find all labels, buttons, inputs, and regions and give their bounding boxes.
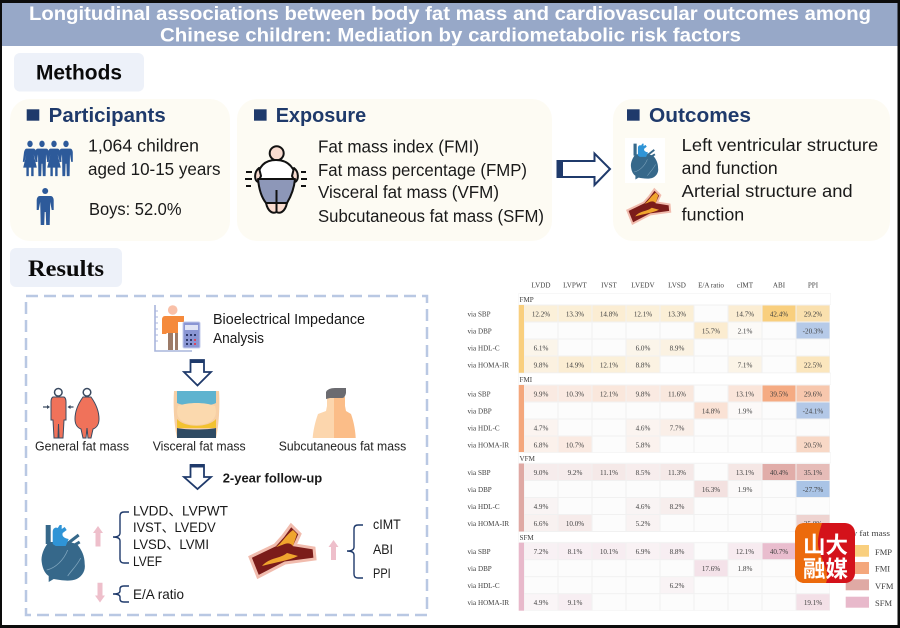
table group: FMP: 13.3% <box>668 310 686 318</box>
table group: FMP: 9.8% <box>534 362 548 370</box>
table group: FMP <box>468 294 831 373</box>
column headers: LVPWT <box>563 282 588 290</box>
table group: SFM: via HDL-C <box>468 582 500 590</box>
table group: FMP: 13.3% <box>566 310 584 318</box>
table group: FMI: via HDL-C <box>468 424 500 432</box>
icon: heart small <box>625 138 665 183</box>
table group: FMP: via HOMA-IR <box>468 362 509 370</box>
heatmap table <box>468 282 894 611</box>
table group: VFM: via HDL-C <box>468 503 500 511</box>
column headers: LVEDV <box>631 282 656 290</box>
icon: obese child with waist measure <box>245 146 307 213</box>
title banner <box>2 3 898 46</box>
watermark logo <box>795 523 855 583</box>
arrow: increase in arterial measures <box>328 540 338 560</box>
table group: SFM: via DBP <box>468 565 492 573</box>
table group: FMI: 4.6% <box>636 424 650 432</box>
text: 2-year follow-up: 2-year follow-up <box>223 471 322 486</box>
icon: boy <box>37 188 54 225</box>
table group: FMI: 29.6% <box>804 390 822 398</box>
table group: VFM: via HOMA-IR <box>468 520 509 528</box>
table group: VFM: 9.0% <box>534 469 548 477</box>
icon: heart <box>42 525 85 582</box>
heading: Methods: Methods <box>36 62 122 84</box>
table group: VFM: 16.3% <box>702 486 720 494</box>
table group: SFM: 9.1% <box>568 599 582 607</box>
text: participant count <box>88 136 221 179</box>
table group: FMI: 9.9% <box>534 390 548 398</box>
panel: exposure <box>237 99 552 241</box>
panel: participants <box>10 99 230 241</box>
table group: FMP: 15.7% <box>702 328 720 336</box>
table group: FMP: 8.8% <box>636 362 650 370</box>
table group: FMI: 1.9% <box>738 408 752 416</box>
table group: FMI: 10.7% <box>566 442 584 450</box>
text: LV measures: LVEF <box>133 553 162 569</box>
table group: VFM: 10.0% <box>566 520 584 528</box>
text: arterial measures: PPI <box>373 565 391 581</box>
text: general fat mass: General fat mass <box>35 439 129 454</box>
table group: VFM: 8.5% <box>636 469 650 477</box>
text: LV measures: LVDD、LVPWT <box>133 503 228 519</box>
table group: VFM: 5.2% <box>636 520 650 528</box>
table group: FMI: 6.8% <box>534 442 548 450</box>
column headers: ABI <box>773 282 786 290</box>
title banner: Chinese children: Mediation by cardiometabolic risk factors <box>160 26 741 46</box>
table group: SFM: 8.1% <box>568 548 582 556</box>
text: outcomes list: and function <box>682 158 778 178</box>
table group: SFM: SFM <box>520 534 534 542</box>
legend: body fat mass: FMI <box>875 564 890 574</box>
icon: group of four children <box>23 141 73 176</box>
table group: FMI: 5.8% <box>636 442 650 450</box>
table group: VFM: 11.1% <box>600 469 618 477</box>
table group: VFM: 1.9% <box>738 486 752 494</box>
icon: subcutaneous fat mass <box>313 388 356 438</box>
table group: FMP: via DBP <box>468 328 492 336</box>
table group: FMP: 14.7% <box>736 310 754 318</box>
table group: VFM: 4.9% <box>534 503 548 511</box>
table group: FMI: 13.1% <box>736 390 754 398</box>
table group: FMI: via HOMA-IR <box>468 442 509 450</box>
icon: artery small <box>627 189 670 224</box>
table group: VFM: VFM <box>520 455 536 463</box>
table group: SFM: 19.1% <box>804 599 822 607</box>
table group: FMP: 29.2% <box>804 310 822 318</box>
table group: FMP: 22.5% <box>804 362 822 370</box>
heading: Results: Results <box>28 256 104 281</box>
table group: VFM: 4.6% <box>636 503 650 511</box>
table group: FMP: 14.9% <box>566 362 584 370</box>
table group: FMP: FMP <box>520 296 534 304</box>
text: bioelectrical impedance analysis: Analysis <box>213 331 264 347</box>
text: arterial measures <box>373 516 401 581</box>
table group: SFM: 4.9% <box>534 599 548 607</box>
arrow: 2-year follow-up <box>184 464 211 489</box>
text: outcomes list <box>682 135 878 225</box>
text: exposure measures <box>318 137 544 226</box>
table group: FMI: 9.8% <box>636 390 650 398</box>
arrow: exposure to outcomes <box>557 154 610 185</box>
table group: FMI: 4.7% <box>534 424 548 432</box>
text: subcutaneous fat mass: Subcutaneous fat mass <box>279 439 407 454</box>
text: bioelectrical impedance analysis <box>213 312 365 347</box>
text: participant count: aged 10-15 years <box>88 159 221 179</box>
legend: body fat mass <box>837 528 894 608</box>
table group: FMP: 12.1% <box>600 362 618 370</box>
column headers: LVDD <box>531 282 551 290</box>
table group: FMI <box>468 373 831 453</box>
icon: general fat mass <box>43 388 99 438</box>
table group: SFM <box>468 532 831 611</box>
table group: FMP: -20.3% <box>803 328 823 336</box>
table group: FMI: via DBP <box>468 408 492 416</box>
table group: FMP: 7.1% <box>738 362 752 370</box>
table group: SFM: 12.1% <box>736 548 754 556</box>
panel: results flow <box>26 296 427 615</box>
column headers: E/A ratio <box>698 282 724 290</box>
table group: FMI: 11.6% <box>668 390 686 398</box>
table group: SFM: via SBP <box>468 548 491 556</box>
heading: Results <box>10 248 122 287</box>
table group: VFM: 11.3% <box>668 469 686 477</box>
table group: FMP: 6.0% <box>636 344 650 352</box>
table group: FMI: FMI <box>520 376 533 384</box>
title banner: Longitudinal associations between body fat mass and cardiovascular outcomes among <box>29 4 871 25</box>
table group: VFM: 25.0% <box>804 520 822 528</box>
text: outcomes list: Left ventricular structure <box>682 135 878 155</box>
table group: FMP: 42.4% <box>770 310 788 318</box>
bracket: LV measures <box>113 512 129 563</box>
table group: FMI: 12.1% <box>600 390 618 398</box>
table group: FMI: 20.5% <box>804 442 822 450</box>
text: outcomes list: function <box>682 205 744 225</box>
watermark logo: 融媒 <box>803 557 849 582</box>
table group: SFM: 1.8% <box>738 565 752 573</box>
table group: FMP: 6.1% <box>534 344 548 352</box>
icon: visceral fat mass <box>174 391 219 438</box>
text: exposure measures: Fat mass percentage (FMP) <box>318 160 527 180</box>
table group: SFM: 10.1% <box>600 548 618 556</box>
icon: bioelectrical impedance scale <box>155 305 200 351</box>
table group: FMI: 10.3% <box>566 390 584 398</box>
text: participant count: 1,064 children <box>88 136 199 156</box>
text: LV measures: LVSD、LVMI <box>133 536 209 552</box>
arrow: down to fat mass types <box>184 360 211 386</box>
text: visceral fat mass: Visceral fat mass <box>153 439 246 454</box>
column headers: IVST <box>601 282 618 290</box>
table group: FMP: 12.2% <box>532 310 550 318</box>
heading: exposure: Exposure <box>276 105 366 127</box>
legend: body fat mass: SFM <box>875 598 892 608</box>
text: arterial measures: ABI <box>373 541 393 557</box>
table group: FMP: 12.1% <box>634 310 652 318</box>
table group: SFM: 40.7% <box>770 548 788 556</box>
watermark logo: 山大 <box>803 533 848 558</box>
heading: participants: Participants <box>49 105 166 127</box>
text: E/A ratio: E/A ratio <box>133 586 184 602</box>
icon: artery <box>250 525 315 577</box>
legend: body fat mass: FMP <box>875 547 892 557</box>
table group: VFM: -27.7% <box>803 486 823 494</box>
table group: FMI: 39.5% <box>770 390 788 398</box>
table group: FMP: via SBP <box>468 310 491 318</box>
column headers: PPI <box>808 282 819 290</box>
text: outcomes list: Arterial structure and <box>682 181 853 201</box>
table group: FMI: via SBP <box>468 390 491 398</box>
table group: VFM: via DBP <box>468 486 492 494</box>
table group: FMI: 7.7% <box>670 424 684 432</box>
column headers: cIMT <box>737 282 754 290</box>
bracket: arterial measures <box>347 525 363 578</box>
text: exposure measures: Visceral fat mass (VFM) <box>318 182 499 202</box>
table group: VFM <box>468 452 831 532</box>
arrow: decrease in E/A ratio <box>95 583 105 602</box>
table group: SFM: 6.9% <box>636 548 650 556</box>
table group: FMI: -24.1% <box>803 408 823 416</box>
column headers <box>531 282 819 290</box>
text: exposure measures: Subcutaneous fat mass (SFM) <box>318 206 544 226</box>
table group: SFM: via HOMA-IR <box>468 599 509 607</box>
table group: FMI: 14.8% <box>702 408 720 416</box>
column headers: LVSD <box>668 282 686 290</box>
table group: SFM: 17.6% <box>702 565 720 573</box>
legend: body fat mass: VFM <box>875 581 894 591</box>
text: LV measures <box>133 503 228 569</box>
table group: VFM: 8.2% <box>670 503 684 511</box>
table group: VFM: 35.1% <box>804 469 822 477</box>
bracket: E/A ratio <box>113 586 129 602</box>
table group: SFM: 6.2% <box>670 582 684 590</box>
panel: outcomes <box>613 99 890 241</box>
table group: VFM: 6.6% <box>534 520 548 528</box>
text: LV measures: IVST、LVEDV <box>133 519 216 535</box>
table group: SFM: 8.8% <box>670 548 684 556</box>
table group: SFM: 7.2% <box>534 548 548 556</box>
legend: body fat mass: Body fat mass <box>837 528 890 538</box>
text: bioelectrical impedance analysis: Bioelectrical Impedance <box>213 312 365 328</box>
table group: VFM: 40.4% <box>770 469 788 477</box>
table group: VFM: 13.1% <box>736 469 754 477</box>
text: arterial measures: cIMT <box>373 516 401 532</box>
heading: outcomes: Outcomes <box>649 105 751 127</box>
text: boys share: Boys: 52.0% <box>89 199 182 219</box>
text: exposure measures: Fat mass index (FMI) <box>318 137 479 157</box>
heading: Methods <box>14 53 144 92</box>
table group: FMP: 2.1% <box>738 328 752 336</box>
table group: FMP: 8.9% <box>670 344 684 352</box>
table group: FMP: 14.8% <box>600 310 618 318</box>
table group: VFM: 9.2% <box>568 469 582 477</box>
table group: VFM: via SBP <box>468 469 491 477</box>
table group: FMP: via HDL-C <box>468 344 500 352</box>
arrow: increase in LV measures <box>93 526 103 546</box>
